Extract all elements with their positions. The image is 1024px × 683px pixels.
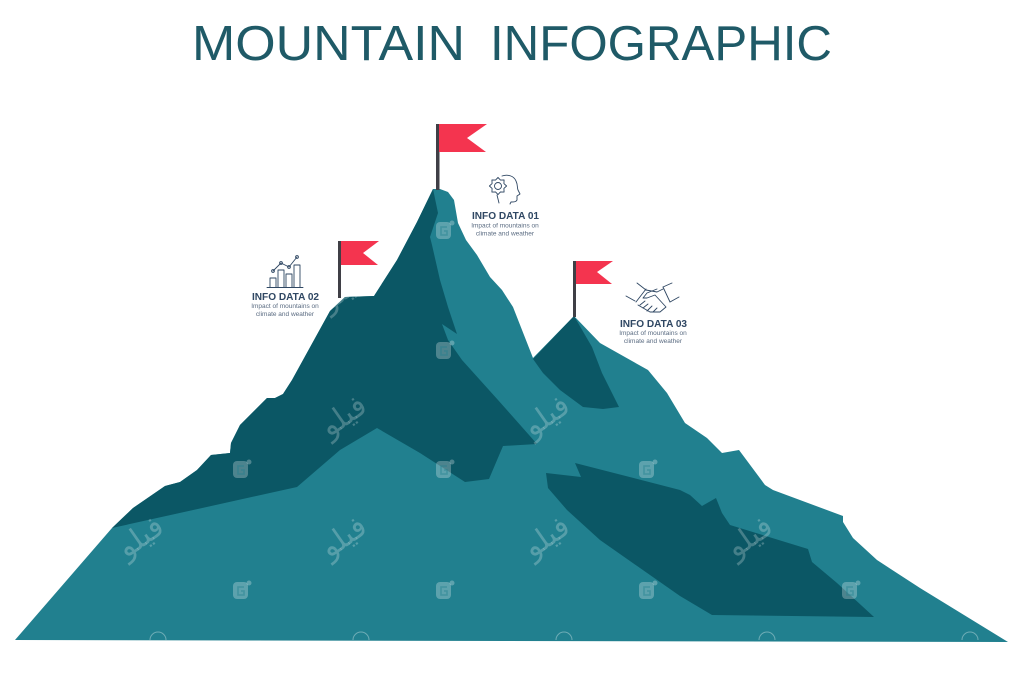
lower right shadow (546, 463, 874, 617)
watermarks: فیلو (515, 388, 577, 446)
heading: INFO DATA 01 (472, 211, 539, 222)
watermarks: فیلو (718, 509, 780, 567)
watermarks (109, 220, 978, 640)
right peak shadow (533, 316, 619, 409)
icon: bar chart (267, 256, 303, 288)
mountain base silhouette (15, 189, 1008, 642)
flag: right peak (573, 261, 613, 317)
description: climate and weather (476, 230, 535, 238)
mountain illustration (15, 189, 1008, 642)
title: INFOGRAPHIC (490, 17, 832, 71)
description: Impact of mountains on (619, 330, 687, 337)
description: climate and weather (624, 338, 683, 345)
icon: head with gear (489, 175, 520, 204)
description: Impact of mountains on (471, 222, 539, 230)
watermarks: فیلو (515, 509, 577, 567)
flag: left peak (338, 241, 379, 298)
title: MOUNTAIN (192, 17, 465, 71)
title (192, 17, 832, 71)
icon: handshake (626, 283, 679, 312)
info block 03 (619, 283, 687, 345)
description: Impact of mountains on (251, 303, 319, 310)
watermarks: فیلو (312, 509, 374, 567)
main peak shadow (112, 189, 537, 528)
info block 01 (471, 175, 539, 238)
flag: main peak (436, 124, 487, 190)
watermarks: فیلو (312, 388, 374, 446)
heading: INFO DATA 03 (620, 319, 687, 330)
info block 02 (251, 256, 319, 318)
heading: INFO DATA 02 (252, 292, 319, 303)
watermarks: فیلو (311, 262, 373, 320)
description: climate and weather (256, 311, 315, 318)
watermarks: فیلو (109, 509, 171, 567)
